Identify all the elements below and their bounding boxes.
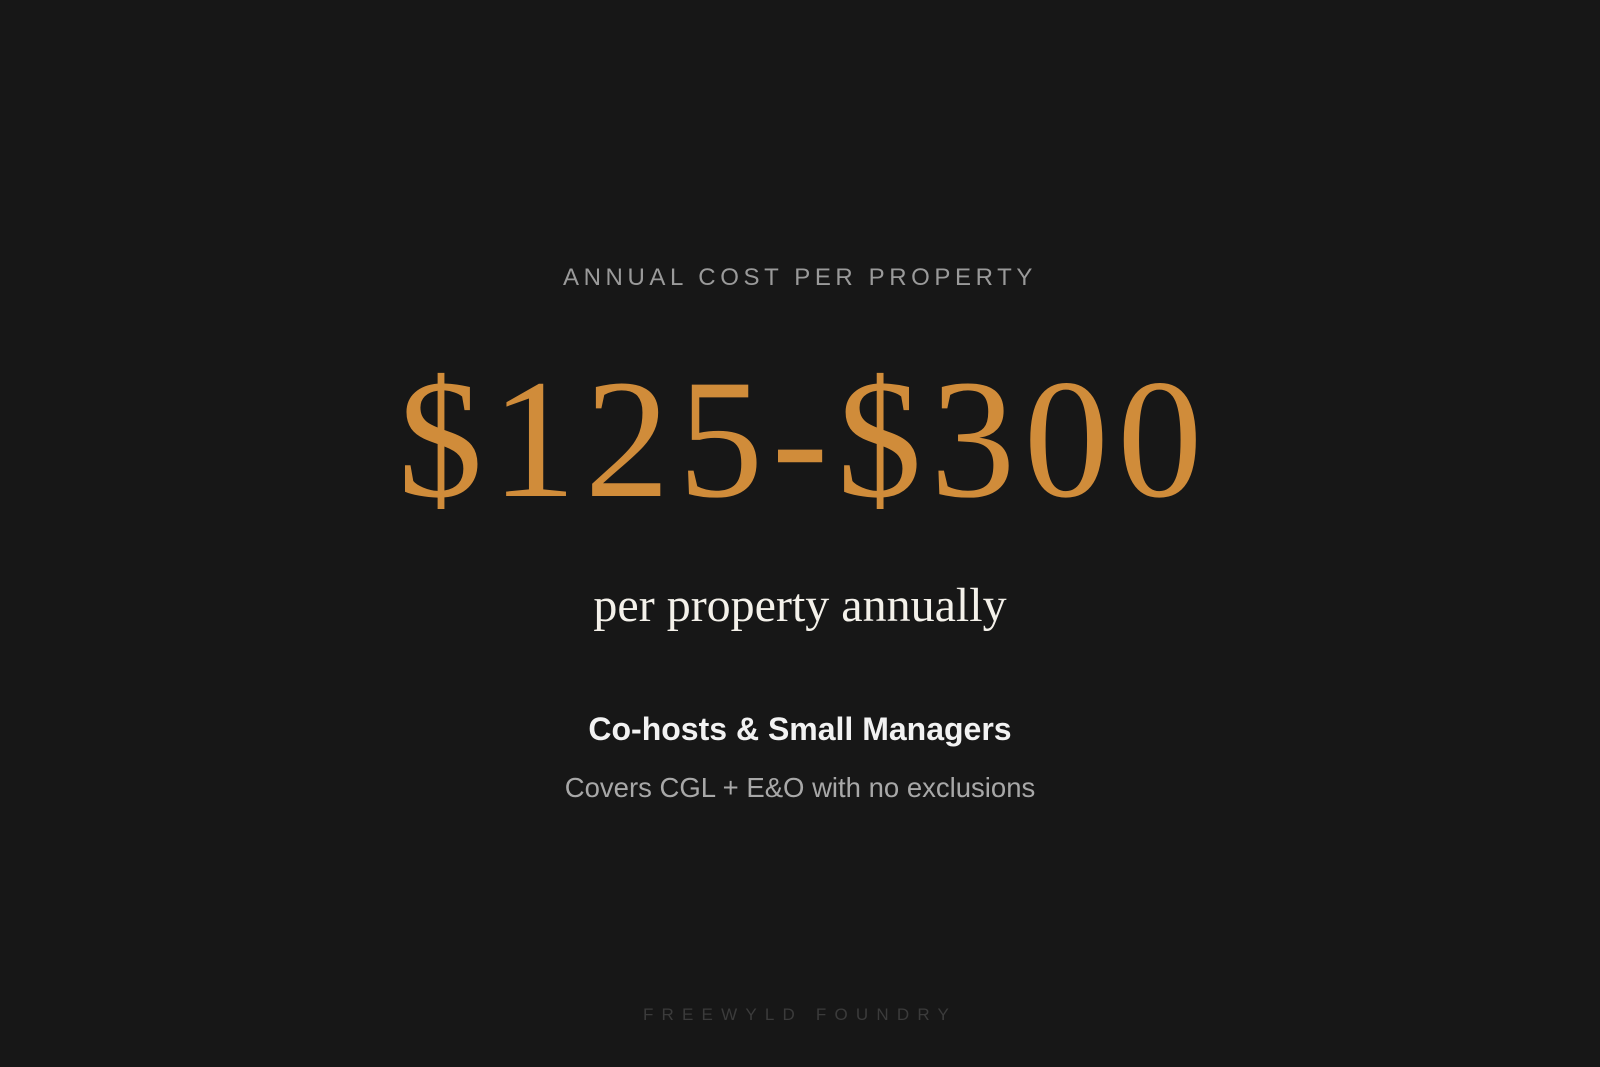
coverage note: Covers CGL + E&O with no exclusions: [565, 772, 1035, 803]
audience label: Co-hosts & Small Managers: [588, 711, 1012, 747]
eyebrow heading: ANNUAL COST PER PROPERTY: [563, 264, 1037, 291]
big price figure: $125-$300: [398, 345, 1211, 533]
subtitle: per property annually: [593, 579, 1007, 632]
footer brand: FREEWYLD FOUNDRY: [643, 1005, 957, 1024]
